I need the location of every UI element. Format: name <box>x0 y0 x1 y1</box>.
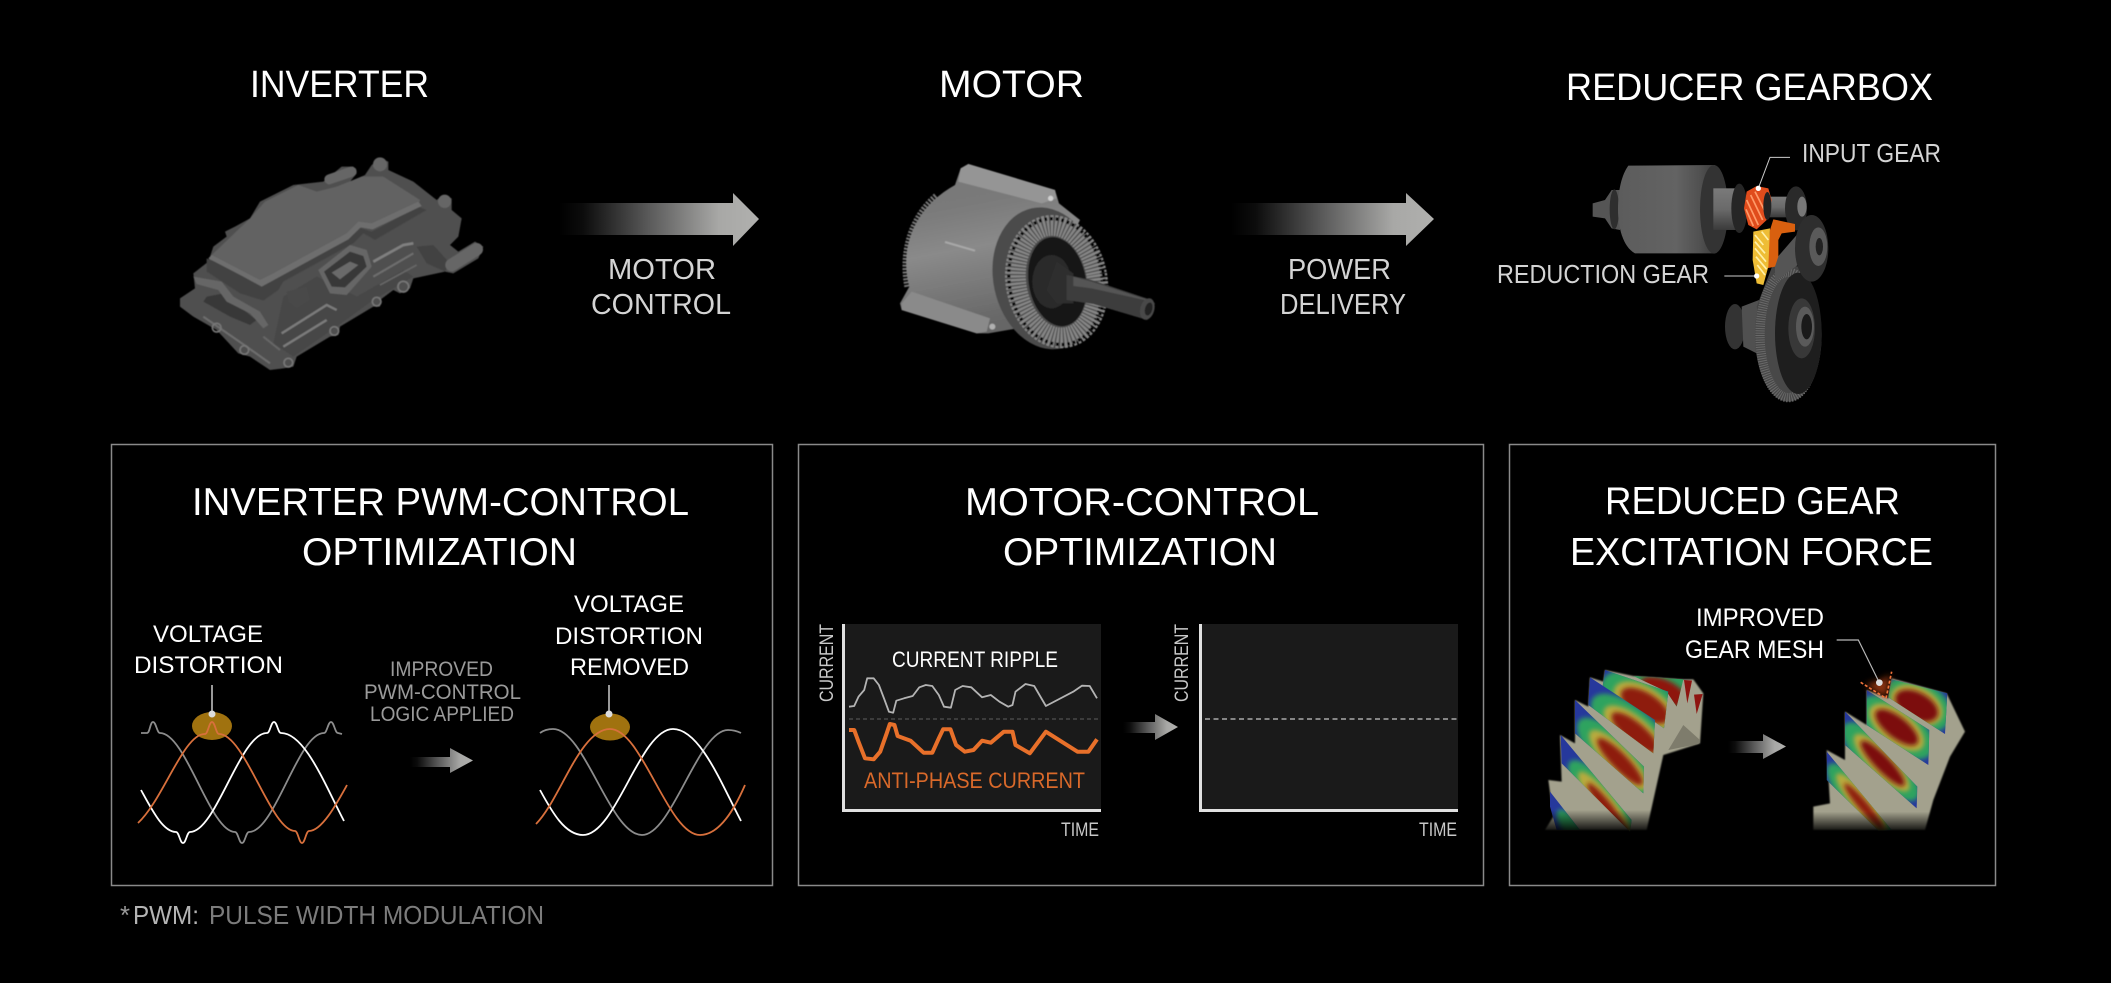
label: reduction gear: REDUCTION GEAR <box>1497 259 1709 289</box>
panel: motor-control optimization <box>798 444 1484 886</box>
label: motor control: MOTOR <box>608 254 716 286</box>
label: input gear: INPUT GEAR <box>1802 138 1941 168</box>
label: motor control <box>591 254 731 321</box>
leader: voltage distortion <box>208 685 216 718</box>
lower large gear <box>1725 304 1745 349</box>
panel: inverter PWM-control optimization <box>112 444 772 886</box>
label: improved gear mesh: IMPROVED <box>1696 604 1824 632</box>
orange input gear <box>1744 186 1772 229</box>
panel heading: INVERTER PWM-CONTROL <box>192 481 689 524</box>
input stub <box>1593 190 1620 230</box>
panel frame <box>1510 444 1996 886</box>
label: motor control: CONTROL <box>591 289 731 321</box>
leader: voltage distortion removed <box>606 685 612 718</box>
panel heading <box>192 481 689 574</box>
panel heading: REDUCED GEAR <box>1605 480 1900 523</box>
axis label: current: CURRENT <box>1172 624 1193 702</box>
axes <box>844 624 1101 810</box>
label: power delivery: POWER <box>1288 254 1391 286</box>
panel heading <box>1570 480 1933 574</box>
shaft and collar <box>1713 188 1737 230</box>
arrow: PWM improvement <box>410 748 473 773</box>
label: voltage distortion removed <box>555 591 703 681</box>
heading: motor: MOTOR <box>939 64 1084 106</box>
illustration: inverter unit <box>180 157 483 370</box>
waveforms: smooth <box>536 729 745 835</box>
illustration: gear tooth stress before <box>1545 669 1704 832</box>
footnote: * <box>120 900 130 930</box>
arrow: ripple cancelled <box>1123 714 1178 740</box>
highlight: distortion ellipse after <box>590 714 630 740</box>
label: voltage distortion <box>134 621 283 679</box>
panel heading: EXCITATION FORCE <box>1570 531 1933 574</box>
label: voltage distortion removed: DISTORTION <box>555 623 703 650</box>
line: current ripple <box>849 678 1097 713</box>
arrow: improved gear <box>1728 734 1786 759</box>
arrow: power delivery <box>1231 193 1434 246</box>
label: improved PWM-control logic applied: LOGIC APPLIED <box>370 703 514 726</box>
label: improved PWM-control logic applied: PWM-CONTROL <box>364 681 521 704</box>
leader: reduction gear <box>1724 274 1757 277</box>
footnote: PULSE WIDTH MODULATION <box>209 900 544 930</box>
panel frame <box>798 444 1484 886</box>
label: voltage distortion: VOLTAGE <box>153 621 263 648</box>
leader: input gear <box>1758 157 1790 188</box>
panel heading: OPTIMIZATION <box>302 531 577 574</box>
drum <box>1618 165 1715 253</box>
intermediate bearing <box>1775 235 1800 282</box>
axes <box>1200 624 1458 810</box>
highlight: distortion ellipse before <box>192 712 232 740</box>
panel heading: MOTOR-CONTROL <box>965 481 1319 524</box>
label: improved PWM-control logic applied <box>364 658 521 726</box>
label: voltage distortion: DISTORTION <box>134 652 283 679</box>
label: voltage distortion removed: VOLTAGE <box>574 591 684 618</box>
panel heading <box>965 481 1319 574</box>
axis label: time: TIME <box>1061 820 1099 841</box>
label: power delivery <box>1280 254 1406 321</box>
axis label: time: TIME <box>1419 820 1457 841</box>
label: voltage distortion removed: REMOVED <box>570 654 689 681</box>
infographic canvas <box>110 70 1996 924</box>
illustration: motor <box>900 164 1157 360</box>
label: power delivery: DELIVERY <box>1280 289 1406 321</box>
yellow reduction gear <box>1753 228 1770 285</box>
panel frame <box>112 444 772 886</box>
heading: reducer gearbox: REDUCER GEARBOX <box>1566 67 1933 109</box>
heading: inverter: INVERTER <box>250 64 429 106</box>
footnote: PWM: <box>133 900 199 930</box>
highlight: improved mesh point <box>1837 640 1892 698</box>
arrow: motor control <box>559 193 759 246</box>
label: anti-phase current: ANTI-PHASE CURRENT <box>864 768 1085 793</box>
illustration: reducer gearbox <box>1593 157 1828 402</box>
orange web <box>1767 219 1795 268</box>
chart: cancelled current <box>1172 624 1458 841</box>
label: improved gear mesh: GEAR MESH <box>1685 636 1824 664</box>
label: improved PWM-control logic applied: IMPROVED <box>390 658 493 681</box>
rear bearing <box>1785 186 1807 230</box>
line: anti-phase current <box>849 724 1097 759</box>
chart: current ripple with anti-phase current <box>817 624 1101 841</box>
label: improved gear mesh <box>1685 604 1824 664</box>
label: current ripple: CURRENT RIPPLE <box>892 647 1058 672</box>
waveforms: distorted <box>138 722 347 843</box>
axis label: current: CURRENT <box>817 624 838 702</box>
illustration: gear tooth stress after <box>1812 639 1966 830</box>
panel heading: OPTIMIZATION <box>1003 531 1277 574</box>
panel: reduced gear excitation force <box>1510 444 1996 886</box>
